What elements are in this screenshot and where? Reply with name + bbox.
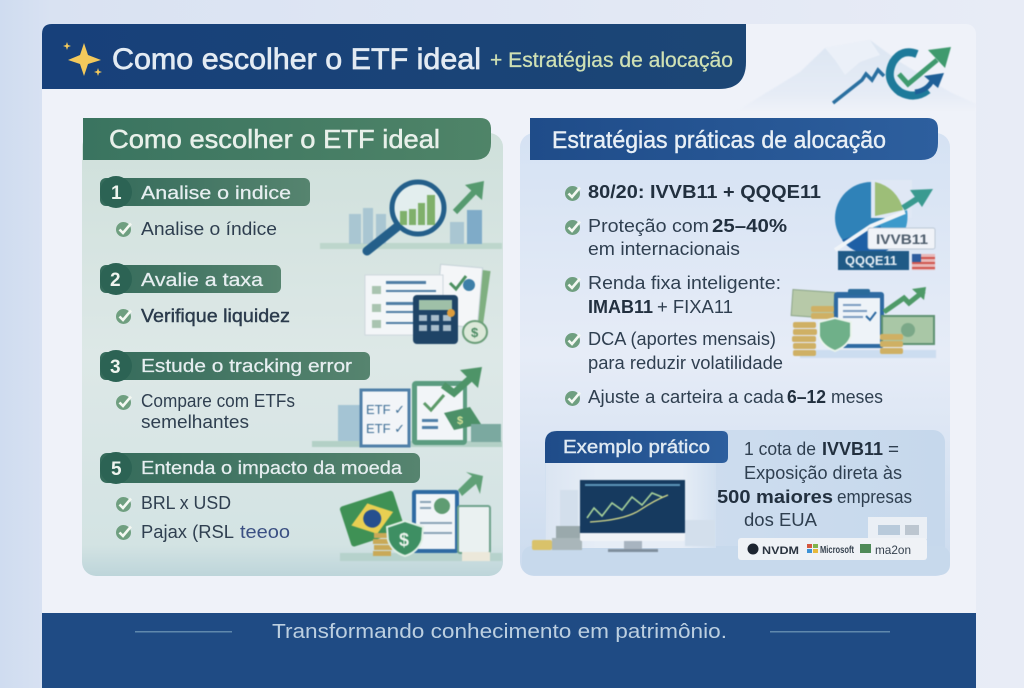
panel: exemplo pratico — [522, 430, 950, 575]
logo — [833, 47, 951, 103]
item: protecao: em internacionais — [588, 239, 740, 259]
item: protecao — [565, 216, 787, 259]
company logos strip: Microsoft — [820, 545, 855, 556]
item: protecao: 25–40% — [712, 216, 787, 236]
subtitle: + Estratégias de alocação — [490, 49, 733, 72]
item: ajuste — [565, 387, 883, 407]
example text — [717, 439, 912, 530]
icon: currency and shield — [339, 472, 502, 561]
item: renda fixa: Renda fixa inteligente: — [588, 273, 781, 293]
icon: ETF documents: $ — [457, 415, 463, 427]
icon: sparkles — [63, 42, 102, 76]
panel heading — [83, 118, 491, 160]
icon: pie chart with labels — [835, 180, 935, 270]
header banner — [42, 24, 746, 89]
example text: 1 cota de — [744, 439, 816, 459]
item: BRL x USD: BRL x USD — [141, 493, 231, 513]
icon: ETF documents: ETF ✓ — [366, 421, 405, 436]
panel: como escolher — [82, 118, 503, 576]
item: renda fixa — [565, 273, 781, 317]
company logos strip: ma2on — [875, 543, 911, 557]
example text: = — [888, 439, 899, 459]
example text: empresas — [837, 487, 912, 507]
item: DCA: para reduzir volatilidade — [588, 353, 783, 373]
example text: Exposição direta às — [744, 463, 902, 483]
item: DCA — [565, 329, 783, 373]
item: 80/20: 80/20: IVVB11 + QQQE11 — [588, 182, 821, 202]
item: Pajax: teeoo — [240, 522, 290, 542]
company logos strip — [738, 517, 927, 560]
item: analise: Analise o índice — [141, 219, 277, 239]
step 5: 5 — [111, 459, 122, 480]
icon: magnifier chart — [320, 181, 502, 251]
item: ajuste: 6–12 — [787, 387, 826, 407]
step 5: Entenda o impacto da moeda — [141, 457, 403, 478]
icon: pie chart with labels: QQQE11 — [845, 253, 897, 268]
step 2: Avalie a taxa — [141, 269, 264, 290]
icon: pie chart with labels: IVVB11 — [876, 231, 928, 247]
item: compare: Compare com ETFs — [141, 391, 295, 411]
item: protecao: Proteção com — [588, 216, 709, 236]
step 1 — [100, 176, 310, 208]
item: liquidez: Verifique liquidez — [141, 306, 290, 326]
item: renda fixa: IMAB11 — [588, 297, 653, 317]
example text: dos EUA — [744, 510, 817, 530]
footer tagline: Transformando conhecimento em patrimônio. — [272, 621, 727, 643]
step 2 — [100, 263, 281, 295]
step 1: Analise o indice — [141, 182, 291, 203]
step 3: Estude o tracking error — [141, 355, 352, 376]
example text: IVVB11 — [822, 439, 883, 459]
icon: ETF documents: ETF ✓ — [366, 402, 405, 417]
step 5 — [100, 452, 420, 484]
footer band — [42, 613, 976, 688]
icon: documents and calculator — [365, 264, 491, 344]
icon: documents and calculator: $ — [471, 325, 479, 340]
icon: ETF documents — [312, 367, 502, 447]
item: renda fixa: + FIXA11 — [657, 297, 733, 317]
exemplo label — [545, 431, 728, 463]
item: compare — [116, 391, 295, 432]
company logos strip: NVDM — [762, 545, 799, 557]
step 1: 1 — [111, 183, 122, 204]
item: Pajax: Pajax (RSL — [141, 522, 234, 542]
panel: estrategias — [520, 118, 950, 576]
panel heading: Estratégias práticas de alocação — [552, 127, 886, 154]
step 2: 2 — [110, 270, 121, 291]
item: ajuste: meses — [831, 387, 883, 407]
icon: currency and shield: $ — [399, 530, 409, 550]
step 3: 3 — [110, 357, 121, 378]
item: DCA: DCA (aportes mensais) — [588, 329, 776, 349]
panel heading — [530, 118, 938, 160]
item: Pajax — [116, 522, 290, 542]
icon: money, clipboard, shield — [791, 287, 936, 358]
title: Como escolher o ETF ideal — [112, 43, 481, 76]
icon: monitor with chart — [532, 480, 715, 552]
exemplo label: Exemplo prático — [563, 437, 710, 457]
example text: 500 maiores — [717, 487, 833, 507]
step 3 — [100, 350, 370, 382]
item: ajuste: Ajuste a carteira a cada — [588, 387, 785, 407]
item: compare: semelhantes — [141, 412, 249, 432]
panel heading: Como escolher o ETF ideal — [109, 124, 440, 154]
mountain backdrop — [735, 40, 976, 112]
